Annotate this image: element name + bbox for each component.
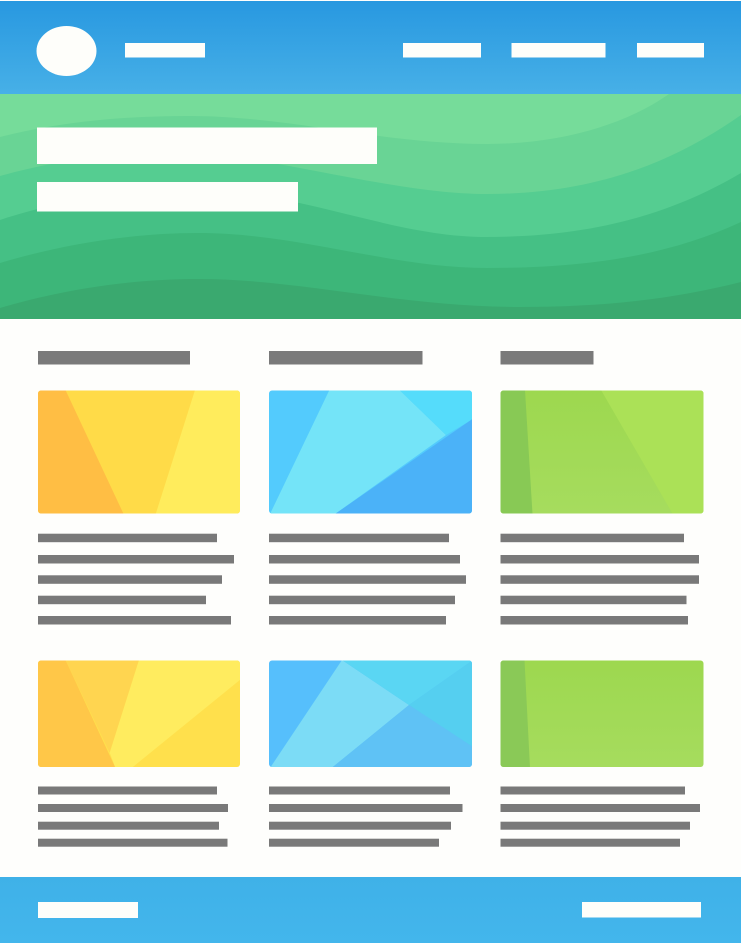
- nav item 1: [403, 43, 481, 58]
- wave layer 1: [0, 94, 741, 319]
- card image: blue row 2: [269, 660, 473, 768]
- wave layer 5: [0, 279, 741, 319]
- card image: green row 1: [500, 390, 704, 514]
- hero banner with waves: [0, 94, 741, 319]
- hero subtitle placeholder: [37, 182, 298, 212]
- card image: yellow row 1: [38, 390, 241, 514]
- text block: row 1 column 2: [269, 534, 466, 624]
- logo placeholder: [36, 26, 96, 76]
- text block: row 2 column 1: [38, 786, 228, 847]
- text block: row 1 column 3: [500, 534, 699, 624]
- wave layer 2: [0, 115, 741, 319]
- text block: row 1 column 1: [38, 534, 234, 624]
- wave layer 4: [0, 222, 741, 319]
- card image: green row 2: [500, 660, 704, 768]
- footer left placeholder: [38, 902, 138, 918]
- card image: blue row 1: [269, 390, 473, 514]
- brand name placeholder: [125, 43, 205, 58]
- text block: row 2 column 3: [500, 786, 700, 847]
- header band: [0, 1, 741, 94]
- column 2 heading: [269, 351, 422, 364]
- nav item 2: [512, 43, 606, 58]
- column 1 heading: [38, 351, 190, 364]
- hero title placeholder: [37, 128, 377, 164]
- wave layer 3: [0, 173, 741, 319]
- footer right placeholder: [582, 902, 701, 918]
- column 3 heading: [500, 351, 594, 364]
- text block: row 2 column 2: [269, 786, 462, 847]
- footer band: [0, 877, 741, 943]
- card image: yellow row 2: [38, 660, 241, 768]
- nav item 3: [637, 43, 704, 58]
